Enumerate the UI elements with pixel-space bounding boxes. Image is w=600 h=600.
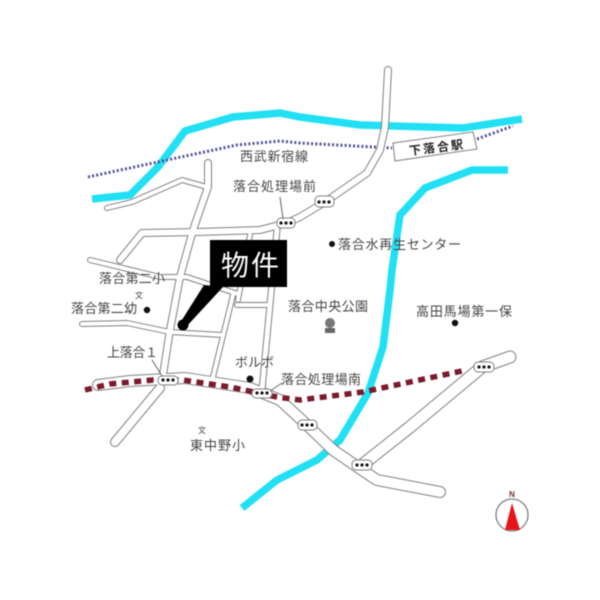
river: north xyxy=(92,113,522,199)
poi: Ochiai central park: 落合中央公園 xyxy=(288,299,368,314)
compass xyxy=(496,490,528,531)
label: Higashi-Nakano elementary school: 文 xyxy=(198,425,206,435)
river: east xyxy=(242,170,508,508)
label: Ochiai No.2 elementary school: 文 xyxy=(135,290,143,300)
label: Ochiai No.2 elementary school: 落合第二小 xyxy=(99,271,165,286)
label: Higashi-Nakano elementary school xyxy=(190,425,245,453)
label: railway: 西武新宿線 xyxy=(240,149,308,164)
leader lines xyxy=(152,197,283,391)
road network xyxy=(82,70,510,492)
label: Ochiai Shorijo-minami: 落合処理場南 xyxy=(281,372,361,387)
poi: Volvo xyxy=(235,355,274,382)
poi: Ochiai No.2 kindergarten: 落合第二幼 xyxy=(71,301,137,316)
property callout xyxy=(178,240,287,330)
poi: water reclamation center: 落合水再生センター xyxy=(338,237,461,252)
railway: Seibu Shinjuku line xyxy=(88,126,513,177)
station label: Shimo-Ochiai: 下落合駅 xyxy=(408,137,464,158)
poi: Takadanobaba No.1 nursery: 高田馬場第一保 xyxy=(416,304,512,319)
interchange markers xyxy=(158,196,494,470)
label: Ochiai Shorijo-mae: 落合処理場前 xyxy=(233,179,316,194)
label: Ochiai No.2 elementary school xyxy=(99,271,165,300)
station label: Shimo-Ochiai xyxy=(393,132,477,161)
property callout: 物件 xyxy=(221,250,279,281)
expressway: dashed line xyxy=(85,371,462,400)
poi: Volvo: ボルボ xyxy=(235,355,274,370)
poi: Ochiai central park xyxy=(288,299,368,333)
label: Kami-Ochiai 1: 上落合１ xyxy=(107,345,158,360)
compass: N xyxy=(509,490,515,499)
label: Higashi-Nakano elementary school: 東中野小 xyxy=(190,438,245,453)
poi: Takadanobaba No.1 nursery xyxy=(416,304,512,326)
